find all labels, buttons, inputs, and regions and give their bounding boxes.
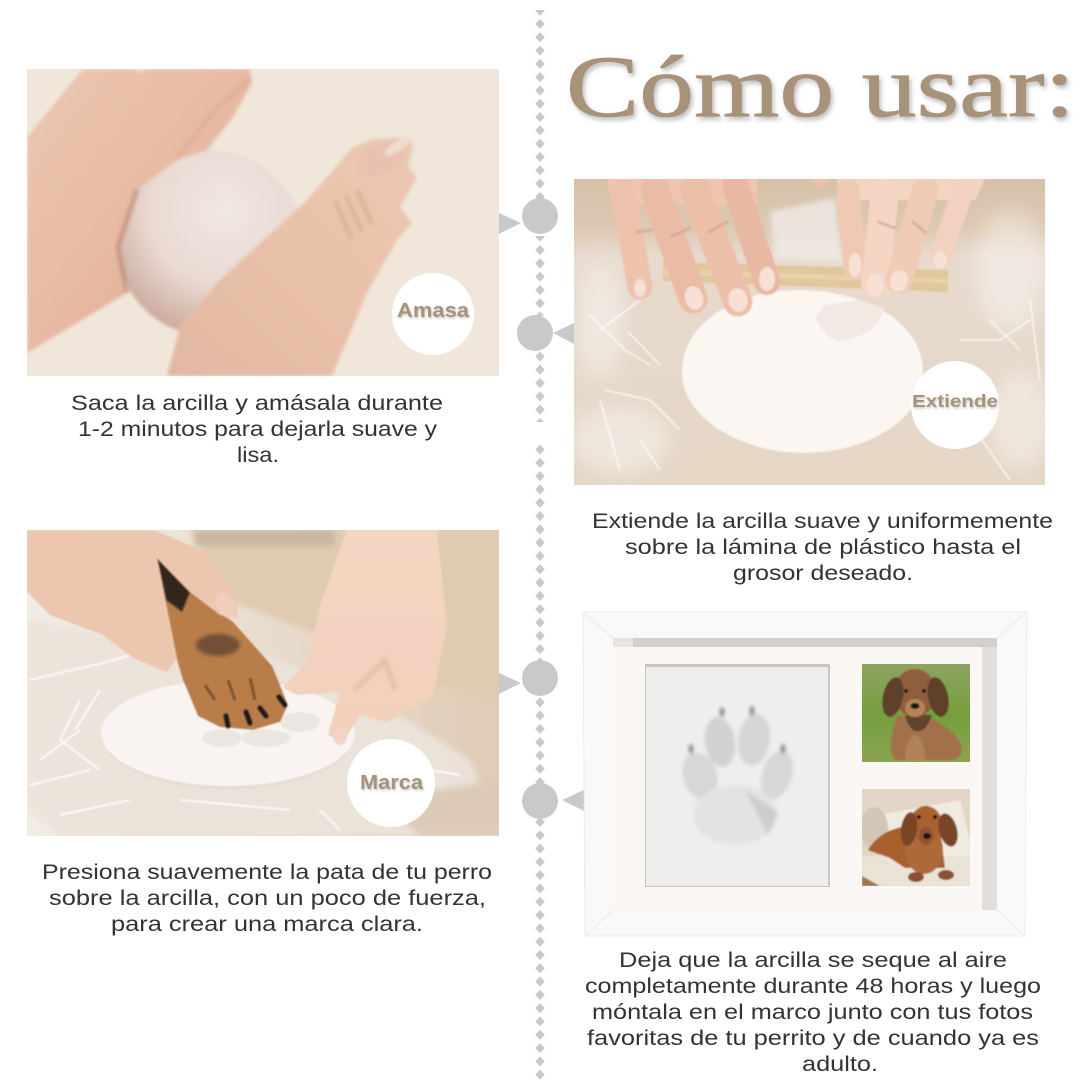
text: step 1: Saca la arcilla y amásala durante: [71, 391, 443, 415]
text: step 1: 1-2 minutos para dejarla suave y: [78, 417, 437, 441]
hand: right hand on roller: [812, 179, 985, 285]
badge: Amasa: Amasa: [397, 300, 470, 322]
text: step 3: sobre la arcilla, con un poco de fuerza,: [49, 886, 486, 910]
text: step 4: [585, 948, 1041, 1076]
paw: [157, 558, 288, 730]
text: step 4: móntala en el marco junto con tus fotos: [592, 1000, 1033, 1024]
hand: left: [27, 530, 237, 672]
icon: paw impression: [676, 706, 799, 845]
text: step 2: sobre la lámina de plástico hasta el: [625, 535, 1021, 559]
badge: Extiende: Extiende: [912, 391, 998, 411]
picture frame with paw print: [583, 612, 1027, 936]
hand: left hand on roller: [607, 179, 767, 302]
text: step 3: [42, 860, 492, 936]
photo: rolling clay: [570, 179, 1050, 485]
badge: Marca: [347, 739, 435, 827]
text: step 2: grosor deseado.: [733, 561, 913, 585]
badge: Marca: Marca: [360, 772, 424, 794]
text: step 2: [592, 509, 1053, 585]
text: step 4: adulto.: [802, 1052, 878, 1076]
timeline spine: [499, 10, 584, 1080]
photo: kneading clay: [27, 69, 499, 376]
text: step 4: Deja que la arcilla se seque al aire: [619, 948, 1007, 972]
text: step 4: completamente durante 48 horas y luego: [585, 974, 1041, 998]
title: Cómo usar:: [566, 39, 1075, 136]
text: step 3: Presiona suavemente la pata de tu perro: [42, 860, 492, 884]
text: step 1: lisa.: [237, 443, 279, 467]
badge: Extiende: [911, 361, 999, 449]
text: step 3: para crear una marca clara.: [111, 912, 423, 936]
hand: right: [283, 530, 447, 742]
photo: puppy on grass: [862, 664, 970, 762]
badge: Amasa: [392, 273, 474, 355]
clay window: [645, 664, 830, 887]
text: step 4: favoritas de tu perrito y de cuando ya es: [587, 1026, 1039, 1050]
photo: adult dachshund on cushion: [860, 789, 970, 886]
photo: paw pressing clay: [27, 530, 499, 836]
text: step 1: [71, 391, 443, 467]
text: step 2: Extiende la arcilla suave y uniformemente: [592, 509, 1053, 533]
